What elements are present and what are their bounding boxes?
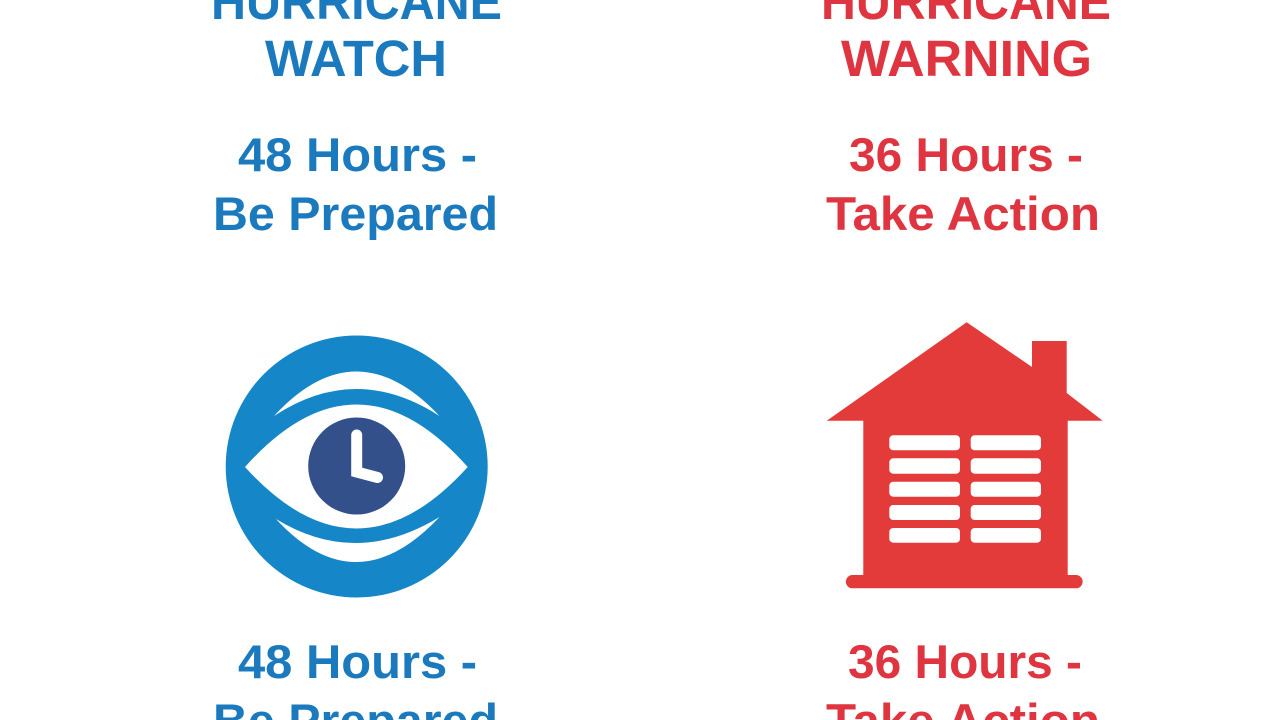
- text: 48 hours be prepared repeated: 48 Hours -: [238, 635, 477, 688]
- panel: hurricane warning: [821, 0, 1111, 720]
- text: 48 hours be prepared: 48 Hours -: [238, 128, 477, 181]
- text: 36 hours take action: 36 Hours -: [849, 128, 1083, 181]
- icon: eye with clock: [226, 336, 488, 598]
- text: 36 hours take action: [826, 128, 1100, 240]
- icon: house with shutters: [827, 322, 1103, 588]
- text: 36 hours take action repeated: [826, 635, 1100, 720]
- heading: hurricane watch: WATCH: [265, 30, 447, 87]
- text: 36 hours take action repeated: 36 Hours -: [848, 635, 1082, 688]
- text: 36 hours take action: Take Action: [826, 187, 1100, 240]
- text: 48 hours be prepared: [213, 128, 498, 240]
- heading: hurricane warning: WARNING: [841, 30, 1092, 87]
- text: 48 hours be prepared: Be Prepared: [213, 187, 498, 240]
- heading: hurricane watch: [211, 0, 502, 87]
- panel: hurricane watch: [211, 0, 502, 720]
- text: 48 hours be prepared repeated: [213, 635, 498, 720]
- heading: hurricane warning: [821, 0, 1111, 87]
